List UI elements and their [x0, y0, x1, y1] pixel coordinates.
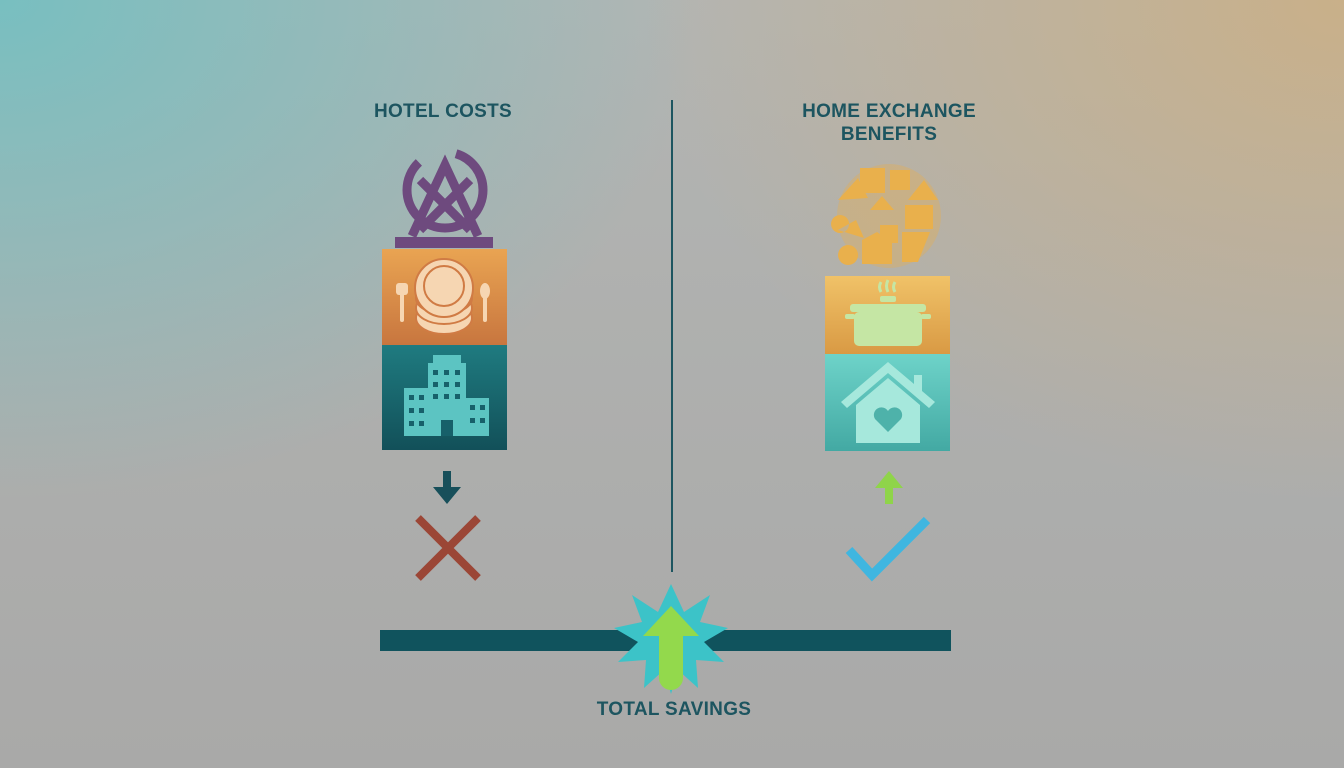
icon box: home with heart — [825, 354, 950, 451]
icon: mosaic circle — [831, 164, 941, 268]
icon box: hotel buildings — [382, 345, 507, 450]
icon: cross — [418, 518, 478, 578]
title: home exchange benefits — [802, 101, 976, 145]
icon: starburst with up arrow — [614, 584, 728, 694]
label: total savings: TOTAL SAVINGS — [597, 699, 751, 720]
title: home exchange benefits: HOME EXCHANGE — [802, 101, 976, 122]
icon: ferris wheel — [395, 152, 493, 248]
arrow: up — [875, 471, 903, 504]
icon: checkmark — [849, 520, 927, 575]
arrow: down — [433, 471, 461, 504]
title: hotel costs: HOTEL COSTS — [374, 101, 512, 122]
title: home exchange benefits: BENEFITS — [841, 124, 937, 145]
icon box: cooking pot — [825, 276, 950, 354]
icon box: dining — [382, 249, 507, 345]
baseline bar — [380, 630, 951, 651]
divider line — [671, 100, 673, 572]
